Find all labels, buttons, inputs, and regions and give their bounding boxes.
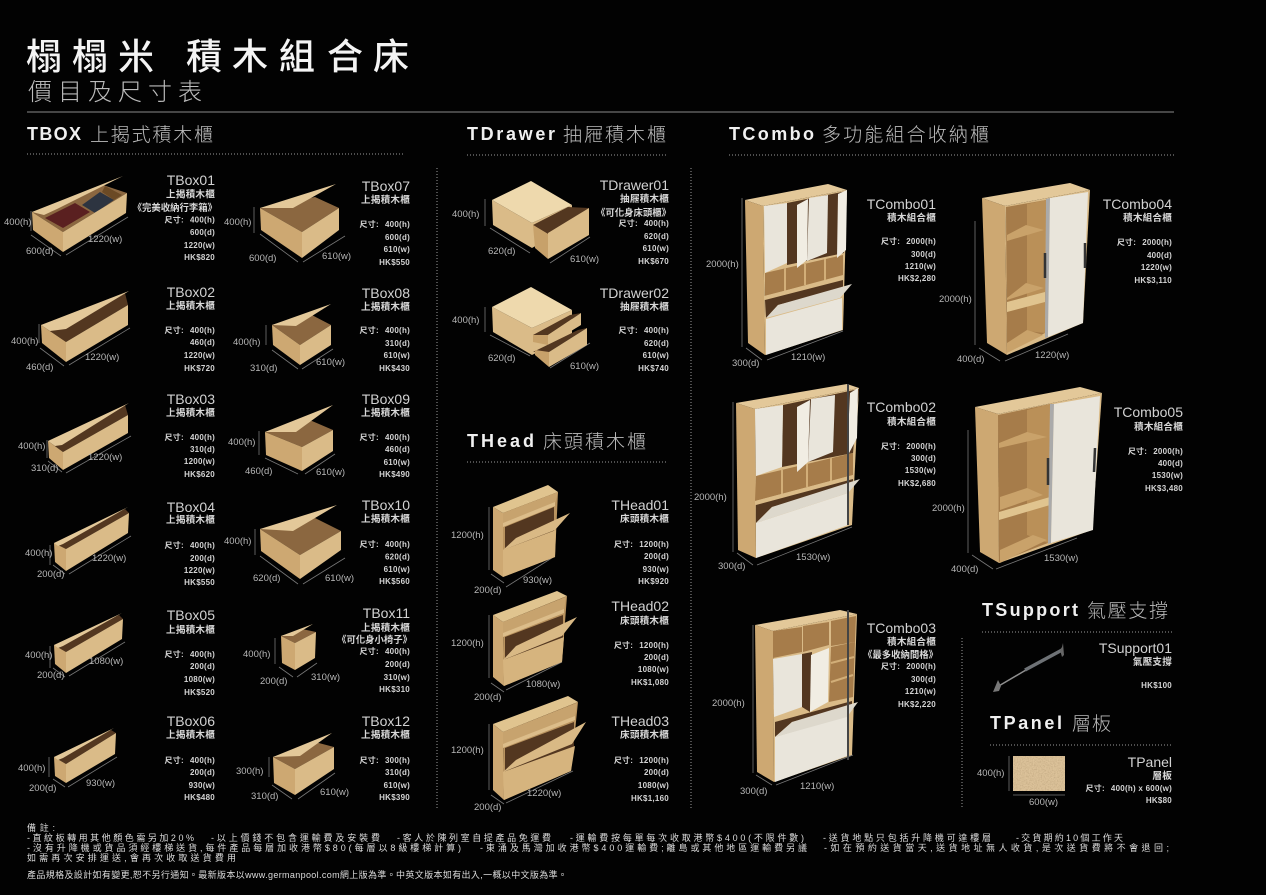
product: TCombo03: 2000(h) [712,698,745,709]
product: TCombo03: 300(d) [740,786,767,797]
product: TBox04: TBox04 [167,499,215,515]
product: THead01 [451,485,669,596]
product: TBox05: TBox05 [167,607,215,623]
product: THead01: HK$920 [638,577,669,586]
product: TBox08: 400(h) [233,337,260,348]
product: THead02: 200(d) [474,692,501,703]
product: TBox04: 1220(w) [92,553,126,564]
product: TBox03: 400(h) [18,441,45,452]
product: TBox09: 460(d) [385,445,410,454]
product: TDrawer01: 620(d) [644,232,669,241]
text: TPanel: 層板 [1152,770,1172,782]
product: TBox01: TBox01 [167,172,215,188]
product: TCombo02: 2000(h) [694,492,727,503]
product: TBox05 [25,607,215,697]
heading: TSupport: TSupport [982,600,1078,620]
product: TBox02: 上揭積木櫃 [166,300,215,312]
product: TBox07: 400(h) [224,217,251,228]
product: THead02: 1200(h) [451,638,484,649]
product: THead01: 200(d) [644,552,669,561]
product: TBox08: 尺寸: 400(h) [360,325,410,335]
heading: TCombo: TCombo [729,124,814,144]
product: TBox01: 400(h) [4,217,31,228]
notes: 產品規格及設計如有變更,恕不另行通知。最新版本以www.germanpool.com網上版為準。中英文版本如有出入,一概以中文版為準。 [27,869,567,880]
product: TBox12: 尺寸: 300(h) [360,755,410,765]
product: TDrawer02: 抽屜積木櫃 [620,301,669,313]
product: TCombo04: 400(d) [957,354,984,365]
text: TPanel: HK$80 [1146,796,1172,805]
product: TBox11: 《可化身小椅子》 [337,634,412,645]
product: TCombo01: 1210(w) [905,262,936,271]
product: TCombo05: HK$3,480 [1145,484,1183,493]
product: TCombo04: 1220(w) [1035,350,1069,361]
product: TCombo02: 1530(w) [905,466,936,475]
product: TBox10: 上揭積木櫃 [361,513,410,525]
product: TCombo01: 300(d) [732,358,759,369]
product: TCombo05: 積木組合櫃 [1134,421,1183,433]
product: THead03 [451,696,669,813]
product: TBox12: 310(d) [251,791,278,802]
product: TDrawer01: 610(w) [643,244,669,253]
product: TDrawer01: 620(d) [488,246,515,257]
heading: TPanel: TPanel [990,713,1062,733]
product: TCombo01: HK$2,280 [898,274,936,283]
product: TCombo03: TCombo03 [867,620,936,636]
product: TBox01: 尺寸: 400(h) [165,214,215,224]
notes: -送貨地點只包括升降機可達樓層 [823,832,991,843]
product: TBox06: TBox06 [167,713,215,729]
product: TBox03: 上揭積木櫃 [166,407,215,419]
product: TBox06: 200(d) [29,783,56,794]
product: THead03: 床頭積木櫃 [620,729,669,741]
product: TBox03: TBox03 [167,391,215,407]
product: TBox11: 310(w) [384,673,410,682]
product: THead01: 200(d) [474,585,501,596]
product: TBox07: TBox07 [362,178,410,194]
product: TBox02: 1220(w) [85,352,119,363]
product: TBox08: 310(d) [385,339,410,348]
notes: -運輸費按每單每次收取港幣$400(不限件數) [570,832,804,843]
product: TBox05: 上揭積木櫃 [166,624,215,636]
product: TBox11: TBox11 [363,605,410,621]
product: TDrawer01: 610(w) [570,254,599,265]
heading: TCombo: 多功能組合收納櫃 [822,124,989,146]
notes: -如在預約送貨當天,送貨地址無人收貨,是次送貨費將不會退回; [824,842,1169,853]
heading: TCombo [729,124,1174,155]
product: THead03: 尺寸: 1200(h) [614,755,669,765]
notes: -沒有升降機或貨品須經樓梯送貨,每件產品每層加收港幣$80(每層以8級樓梯計算) [27,842,461,853]
product: TBox12: 610(w) [384,781,410,790]
product: TCombo04: 尺寸: 2000(h) [1117,237,1172,247]
product: THead02 [451,591,669,703]
text: TPanel: 400(h) [977,768,1004,779]
product: TCombo02: 300(d) [911,454,936,463]
product: TBox05: 尺寸: 400(h) [165,649,215,659]
heading: TDrawer: TDrawer [467,124,555,144]
product: TBox03: 310(d) [31,463,58,474]
product: TBox04: 尺寸: 400(h) [165,540,215,550]
product: TBox04 [25,499,215,587]
product: TBox04: 200(d) [37,569,64,580]
heading: TDrawer [467,124,667,155]
text: TPanel: 600(w) [1029,797,1058,808]
product: TBox03: 1200(w) [184,457,215,466]
product: TBox06: 930(w) [86,778,115,789]
product: TBox11: 200(d) [260,676,287,687]
product: TCombo05 [932,387,1183,575]
product: THead01: 930(w) [523,575,552,586]
product: TBox05: 1080(w) [184,675,215,684]
product: THead02: 1080(w) [526,679,560,690]
product: TBox06: 200(d) [190,768,215,777]
product: TBox03: 310(d) [190,445,215,454]
text: TSupport01: TSupport01 [1099,640,1172,656]
product: TBox01: 1220(w) [88,234,122,245]
product: TCombo04: 400(d) [1147,251,1172,260]
notes: -客人於陳列室自提產品免運費 [397,832,551,843]
product: TBox08: 610(w) [384,351,410,360]
product: TBox12: 310(d) [385,768,410,777]
product: TBox03: 尺寸: 400(h) [165,432,215,442]
product: TBox02 [11,284,215,373]
product: TCombo04 [939,183,1172,365]
product: TCombo05: TCombo05 [1114,404,1183,420]
product: TCombo03: 1210(w) [905,687,936,696]
product: TBox02: 460(d) [26,362,53,373]
product: TBox02: HK$720 [184,364,215,373]
product: TBox11: 上揭積木櫃 [361,622,410,634]
product: TCombo01: 積木組合櫃 [887,212,936,224]
product: TDrawer01: TDrawer01 [600,177,669,193]
product: TBox03: HK$620 [184,470,215,479]
product: TBox11: 200(d) [385,660,410,669]
product: TCombo01: 300(d) [911,250,936,259]
product: TBox07: 610(w) [322,251,351,262]
product: TCombo04: 1220(w) [1141,263,1172,272]
product: TDrawer02: 610(w) [570,361,599,372]
product: TBox07: 600(d) [385,233,410,242]
product: THead03: 1220(w) [527,788,561,799]
product: TCombo02: 積木組合櫃 [887,416,936,428]
product: TBox12: 上揭積木櫃 [361,729,410,741]
icon: panel swatch [1013,756,1065,791]
product: TBox12: 610(w) [320,787,349,798]
panel: TBox series [4,124,412,802]
product: THead01: THead01 [611,497,669,513]
product: THead03: 1200(h) [451,745,484,756]
product: TCombo04: 2000(h) [939,294,972,305]
heading: TPanel [990,713,1172,745]
product: TCombo01: TCombo01 [867,196,936,212]
product: TBox11: 400(h) [243,649,270,660]
product: TBox07: 尺寸: 400(h) [360,219,410,229]
product: TCombo01: 尺寸: 2000(h) [881,236,936,246]
product: TCombo04: 積木組合櫃 [1123,212,1172,224]
product: TBox07: 610(w) [384,245,410,254]
product: THead01: 930(w) [643,565,669,574]
product: TBox01: 1220(w) [184,241,215,250]
product: TCombo03 [712,610,938,797]
product: TBox06: 930(w) [189,781,215,790]
product: TBox09: 610(w) [316,467,345,478]
product: TCombo02: TCombo02 [867,399,936,415]
product: TBox01: HK$820 [184,253,215,262]
product: TCombo05: 尺寸: 2000(h) [1128,446,1183,456]
product: TDrawer01: 《可化身床頭櫃》 [596,207,671,218]
product: TBox04: 1220(w) [184,566,215,575]
text: TPanel [977,754,1172,808]
product: TBox10: 620(d) [253,573,280,584]
product: TBox08: TBox08 [362,285,410,301]
product: TBox05: 400(h) [25,650,52,661]
product: TBox10: 620(d) [385,552,410,562]
product: TCombo01: 1210(w) [791,352,825,363]
product: TBox12: TBox12 [362,713,410,729]
product: THead02: 床頭積木櫃 [620,615,669,627]
product: TBox08 [233,285,410,374]
product: TBox09: 上揭積木櫃 [361,407,410,419]
product: TDrawer01: 尺寸: 400(h) [619,218,669,228]
product: THead03: HK$1,160 [631,794,669,803]
product: TBox06: HK$480 [184,793,215,802]
product: TCombo01: 2000(h) [706,259,739,270]
product: TBox12: HK$390 [379,793,410,802]
product: TCombo03: 《最多收納間格》 [863,649,938,660]
heading: TBOX [27,124,405,154]
product: TBox06 [18,713,215,802]
product: TDrawer02: 400(h) [452,315,479,326]
product: THead01: 床頭積木櫃 [620,513,669,525]
product: TBox10: HK$560 [379,577,410,586]
notes: 備註: [27,822,55,833]
heading: TBOX: 上揭式積木櫃 [90,124,213,146]
product: TBox07: 上揭積木櫃 [361,194,410,206]
product: TBox05: 200(d) [37,670,64,681]
heading: TSupport [982,600,1172,632]
product: TCombo03: 尺寸: 2000(h) [881,661,936,671]
product: TCombo01 [706,184,936,369]
heading: THead [467,431,667,462]
product: TDrawer01: HK$670 [638,257,669,266]
product: TBox07: HK$550 [379,258,410,267]
text: TSupport01 [1099,640,1172,690]
product: TCombo03: HK$2,220 [898,700,936,709]
panel: TPanel [977,713,1172,808]
product: TBox02: TBox02 [167,284,215,300]
text: TPanel: 尺寸: 400(h) x 600(w) [1085,783,1172,793]
product: THead02: THead02 [611,598,669,614]
notes: -交貨期約10個工作天 [1016,832,1123,843]
product: TBox06: 上揭積木櫃 [166,729,215,741]
product: TDrawer02 [452,285,669,373]
product: TBox10: 尺寸: 400(h) [360,539,410,549]
product: TBox01: 600(d) [26,246,53,257]
product: TDrawer01: 400(h) [452,209,479,220]
product: TCombo02: 尺寸: 2000(h) [881,441,936,451]
product: TBox08: HK$430 [379,364,410,373]
notes: -直紋板轉用其他顏色需另加20% [27,832,194,843]
product: TCombo05: 2000(h) [932,503,965,514]
text: TPanel: TPanel [1128,754,1172,770]
product: TBox06: 尺寸: 400(h) [165,755,215,765]
product: TCombo02: 1530(w) [796,552,830,563]
product: THead03: 200(d) [474,802,501,813]
notes: -以上價錢不包含運輸費及安裝費 [211,832,380,843]
product: TBox01: 600(d) [190,228,215,237]
product: TDrawer02: 620(d) [644,339,669,348]
product: THead02: 200(d) [644,653,669,662]
product: TBox10 [224,497,410,586]
product: TDrawer02: 尺寸: 400(h) [619,325,669,335]
product: TBox05: HK$520 [184,688,215,697]
product: TDrawer01: 抽屜積木櫃 [620,193,669,205]
heading: TSupport: 氣壓支撐 [1087,600,1168,622]
product: TBox01 [4,172,217,262]
heading: TDrawer: 抽屜積木櫃 [563,124,666,146]
heading: THead: 床頭積木櫃 [543,431,646,453]
panel: TCombo series [694,124,1183,797]
product: TBox05: 200(d) [190,662,215,671]
product: TBox09: TBox09 [362,391,410,407]
product: THead03: THead03 [611,713,669,729]
product: TDrawer01 [452,177,671,266]
product: TBox09: 400(h) [228,437,255,448]
product: TCombo02: 300(d) [718,561,745,572]
product: TBox04: HK$550 [184,578,215,587]
product: TBox03 [18,391,215,479]
product: TBox05: 1080(w) [89,656,123,667]
product: TBox04: 400(h) [25,548,52,559]
product: TBox08: 上揭積木櫃 [361,301,410,313]
product: TBox11: 尺寸: 400(h) [360,646,410,656]
product: TBox01: 《完美收納行李箱》 [133,202,217,213]
notes [27,822,1169,880]
product: THead02: 尺寸: 1200(h) [614,640,669,650]
product: TCombo04: HK$3,110 [1134,276,1172,285]
product: TCombo04: TCombo04 [1103,196,1172,212]
product: TBox04: 200(d) [190,554,215,563]
product: TCombo03: 積木組合櫃 [887,636,936,648]
panel: TSupport [982,600,1172,692]
panel: THead series [451,431,669,813]
product: TBox02: 尺寸: 400(h) [165,325,215,335]
product: THead02: HK$1,080 [631,678,669,687]
heading: TPanel: 層板 [1072,713,1111,735]
product: TBox10: TBox10 [362,497,410,513]
product: TDrawer02: 610(w) [643,351,669,360]
product: THead03: 1080(w) [638,781,669,790]
product: TCombo05: 400(d) [1158,459,1183,468]
product: TBox09: HK$490 [379,470,410,479]
text: TSupport01: 氣壓支撐 [1133,656,1172,668]
product: TBox11: HK$310 [379,685,410,694]
product: TCombo05: 1530(w) [1152,471,1183,480]
heading: THead: THead [467,431,534,451]
heading: TBOX: TBOX [27,124,81,144]
product: TCombo02 [694,384,936,572]
product: THead01: 1200(h) [451,530,484,541]
icon: gas strut [993,643,1064,692]
product: TBox09: 610(w) [384,458,410,467]
product: TBox09 [228,391,410,479]
product: TCombo03: 300(d) [911,675,936,684]
product: TBox12: 300(h) [236,766,263,777]
product: TBox09: 460(d) [245,466,272,477]
notes: -東涌及馬灣加收港幣$400運輸費;離島或其他地區運輸費另議 [480,842,807,853]
product: TCombo02: HK$2,680 [898,479,936,488]
product: TCombo03: 1210(w) [800,781,834,792]
product: TBox08: 310(d) [250,363,277,374]
product: TBox08: 610(w) [316,357,345,368]
product: THead03: 200(d) [644,768,669,777]
title: 榻榻米 積木組合床 [26,36,409,77]
panel: TDrawer series [452,124,671,373]
subtitle: 價目及尺寸表 [28,79,202,106]
product: TBox10: 610(w) [384,565,410,574]
product: TBox12 [236,713,410,802]
product: TBox02: 1220(w) [184,351,215,360]
notes: 如需再次安排運送,會再次收取送貨費用 [27,852,236,863]
product: TBox01: 上揭積木櫃 [166,188,215,200]
text: TSupport01: HK$100 [1141,681,1172,690]
product: TBox07 [224,178,410,267]
product: TBox11: 310(w) [311,672,340,683]
product: TBox02: 460(d) [190,338,215,347]
product: TBox04: 上揭積木櫃 [166,514,215,526]
product: TBox11 [243,605,412,694]
product: TCombo05: 400(d) [951,564,978,575]
product: TBox02: 400(h) [11,336,38,347]
product: TBox09: 尺寸: 400(h) [360,432,410,442]
product: TBox03: 1220(w) [88,452,122,463]
product: TDrawer02: TDrawer02 [600,285,669,301]
product: TBox06: 400(h) [18,763,45,774]
product: THead01: 尺寸: 1200(h) [614,539,669,549]
product: TDrawer02: HK$740 [638,364,669,373]
product: TDrawer02: 620(d) [488,353,515,364]
product: TBox10: 610(w) [325,573,354,584]
product: TCombo05: 1530(w) [1044,553,1078,564]
product: TBox10: 400(h) [224,536,251,547]
product: TBox07: 600(d) [249,253,276,264]
product: THead02: 1080(w) [638,665,669,674]
